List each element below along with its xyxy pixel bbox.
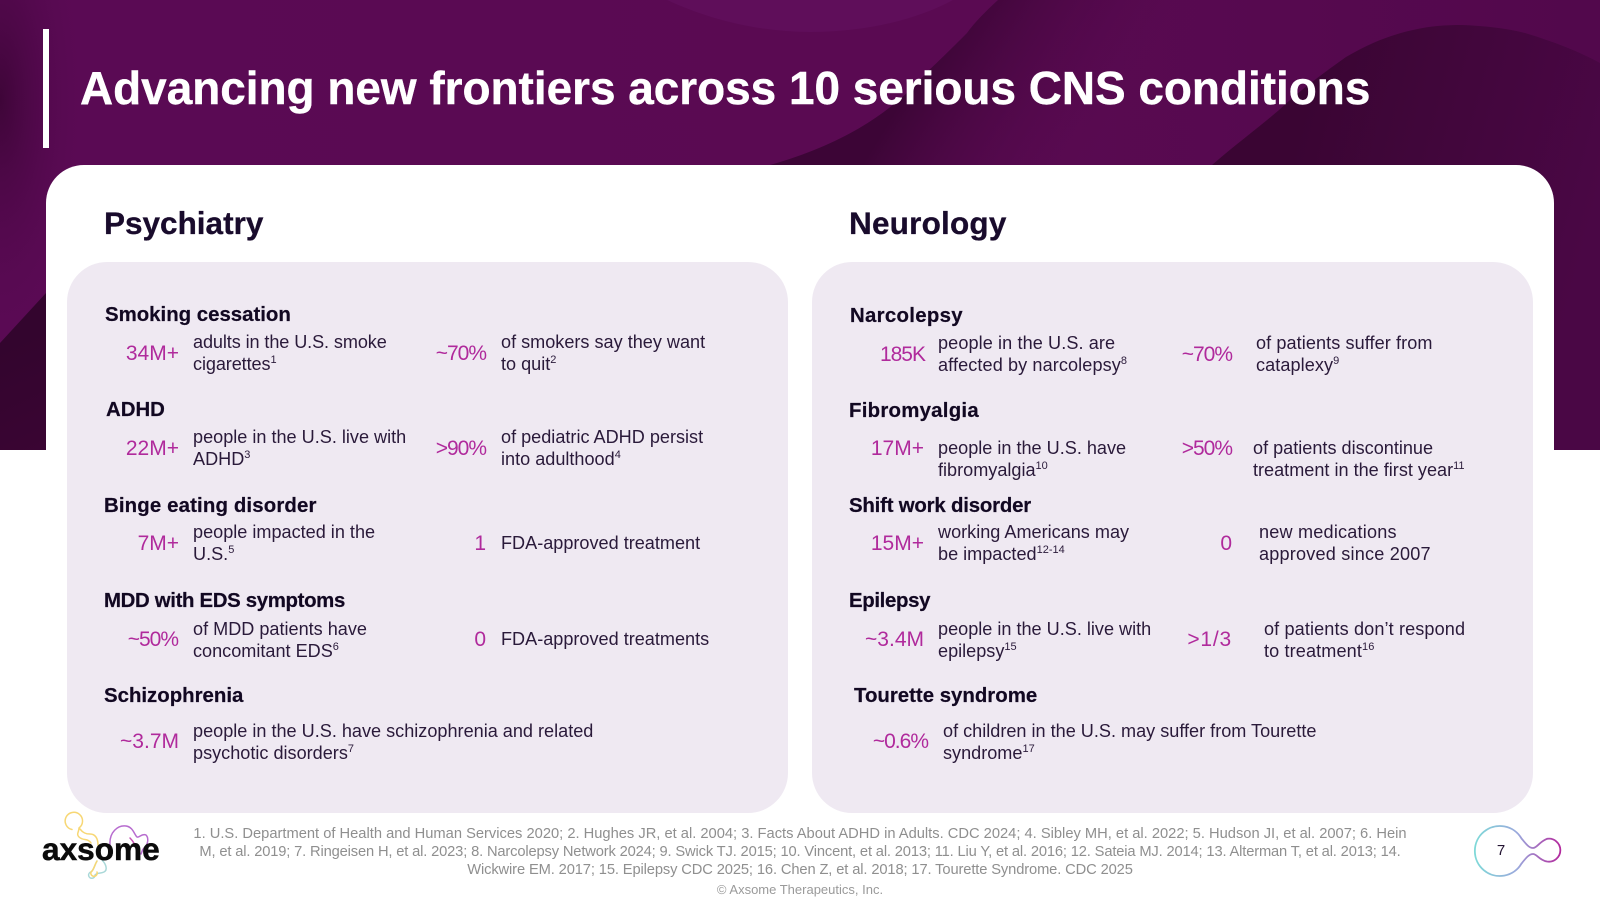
condition: ADHD: ADHD3 [193, 449, 250, 469]
condition: shift work disorder [849, 495, 1431, 564]
heading: Neurology: Neurology [849, 205, 1007, 241]
footnotes: M, et al. 2019; 7. Ringeisen H, et al. 2023; 8. Narcolepsy Network 2024; 9. Swick TJ. 2015; 10. Vincent, et al. 2013; 11. Liu Y, et al. 2016; 12. Sateia MJ. 2014; 13. Alterman T, et al. 2013; 14. [199, 844, 1401, 860]
condition: schizophrenia: ~3.7M [120, 730, 179, 753]
condition: smoking cessation: adults in the U.S. smoke [193, 332, 387, 352]
condition: MDD with EDS symptoms [104, 590, 709, 661]
condition: MDD with EDS symptoms: MDD with EDS symptoms [104, 590, 345, 612]
condition: shift work disorder: 15M+ [871, 532, 924, 555]
condition: schizophrenia: psychotic disorders7 [193, 743, 354, 763]
condition: ADHD: people in the U.S. live with [193, 427, 406, 447]
condition: shift work disorder: approved since 2007 [1259, 544, 1431, 564]
condition: smoking cessation [105, 304, 705, 374]
condition: narcolepsy: cataplexy9 [1256, 355, 1339, 375]
condition: narcolepsy [850, 305, 1432, 375]
icon: logo loops [64, 812, 148, 879]
condition: epilepsy: people in the U.S. live with [938, 619, 1151, 639]
condition: fibromyalgia: people in the U.S. have [938, 438, 1126, 458]
condition: fibromyalgia: Fibromyalgia [849, 400, 979, 422]
condition: ADHD: ADHD [106, 399, 165, 421]
condition: MDD with EDS symptoms: concomitant EDS6 [193, 641, 339, 661]
condition: shift work disorder: new medications [1259, 522, 1397, 542]
condition: schizophrenia: people in the U.S. have schizophrenia and related [193, 721, 593, 741]
logo: axsome [42, 812, 160, 879]
condition: smoking cessation: of smokers say they want [501, 332, 705, 352]
footnotes [193, 826, 1407, 878]
condition: binge eating disorder: people impacted in the [193, 522, 375, 542]
condition: fibromyalgia [849, 400, 1465, 480]
condition: epilepsy: to treatment16 [1264, 641, 1374, 661]
condition: shift work disorder: be impacted12-14 [938, 544, 1065, 564]
condition: shift work disorder: working Americans may [938, 522, 1129, 542]
condition: epilepsy: ~3.4M [865, 628, 924, 651]
condition: ADHD: >90% [436, 437, 486, 460]
condition: Tourette syndrome: syndrome17 [943, 743, 1035, 763]
condition: ADHD: 22M+ [126, 437, 179, 460]
heading: Psychiatry: Psychiatry [104, 205, 263, 241]
condition: epilepsy: of patients don’t respond [1264, 619, 1465, 639]
condition: fibromyalgia: treatment in the first year11 [1253, 460, 1465, 480]
white content card [46, 165, 1554, 900]
condition: narcolepsy: of patients suffer from [1256, 333, 1432, 353]
condition: binge eating disorder: FDA-approved treatment [501, 533, 700, 553]
condition: ADHD [106, 399, 703, 469]
condition: fibromyalgia: of patients discontinue [1253, 438, 1433, 458]
condition: fibromyalgia: >50% [1182, 437, 1232, 460]
condition: smoking cessation: 34M+ [126, 342, 179, 365]
condition: binge eating disorder: 1 [474, 532, 486, 555]
condition: schizophrenia: Schizophrenia [104, 685, 243, 707]
condition: Tourette syndrome: ~0.6% [873, 730, 928, 753]
condition: epilepsy [849, 590, 1465, 661]
condition: shift work disorder: Shift work disorder [849, 495, 1031, 517]
condition: schizophrenia [104, 685, 593, 763]
condition: smoking cessation: to quit2 [501, 354, 556, 374]
condition: Tourette syndrome [854, 685, 1316, 763]
condition: narcolepsy: people in the U.S. are [938, 333, 1115, 353]
condition: Tourette syndrome: of children in the U.S. may suffer from Tourette [943, 721, 1316, 741]
condition: epilepsy: >1/3 [1187, 628, 1232, 651]
background banner [0, 0, 1600, 450]
condition: narcolepsy: affected by narcolepsy8 [938, 355, 1127, 375]
condition: binge eating disorder: Binge eating disorder [104, 495, 317, 517]
condition: narcolepsy: Narcolepsy [850, 305, 963, 327]
condition: fibromyalgia: fibromyalgia10 [938, 460, 1048, 480]
page number badge [1474, 825, 1562, 877]
footnotes: Wickwire EM. 2017; 15. Epilepsy CDC 2025; 16. Chen Z, et al. 2018; 17. Tourette Syndrome. CDC 2025 [467, 862, 1133, 878]
page number: 7 [1497, 842, 1505, 859]
condition: MDD with EDS symptoms: 0 [474, 628, 486, 651]
condition: smoking cessation: cigarettes1 [193, 354, 276, 374]
title: Advancing new frontiers across 10 serious CNS conditions [80, 62, 1370, 114]
condition: ADHD: into adulthood4 [501, 449, 621, 469]
condition: binge eating disorder [104, 495, 700, 564]
condition: Tourette syndrome: Tourette syndrome [854, 685, 1037, 707]
condition: epilepsy: Epilepsy [849, 590, 930, 612]
condition: binge eating disorder: 7M+ [138, 532, 179, 555]
condition: fibromyalgia: 17M+ [871, 437, 924, 460]
panel: neurology [812, 262, 1533, 813]
condition: MDD with EDS symptoms: FDA-approved treatments [501, 629, 709, 649]
condition: epilepsy: epilepsy15 [938, 641, 1017, 661]
condition: narcolepsy: ~70% [1182, 343, 1232, 366]
condition: MDD with EDS symptoms: ~50% [128, 628, 178, 651]
wordmark: axsome [42, 831, 160, 867]
condition: shift work disorder: 0 [1220, 532, 1232, 555]
panel: psychiatry [67, 262, 788, 813]
condition: smoking cessation: ~70% [436, 342, 486, 365]
condition: smoking cessation: Smoking cessation [105, 304, 291, 326]
accent bar [43, 29, 49, 148]
condition: MDD with EDS symptoms: of MDD patients have [193, 619, 367, 639]
condition: binge eating disorder: U.S.5 [193, 544, 234, 564]
condition: ADHD: of pediatric ADHD persist [501, 427, 703, 447]
copyright: © Axsome Therapeutics, Inc. [717, 882, 883, 897]
condition: narcolepsy: 185K [880, 343, 925, 366]
footnotes: 1. U.S. Department of Health and Human Services 2020; 2. Hughes JR, et al. 2004; 3. Facts About ADHD in Adults. CDC 2024; 4. Sibley MH, et al. 2022; 5. Hudson JI, et al. 2007; 6. Hein [193, 826, 1407, 842]
